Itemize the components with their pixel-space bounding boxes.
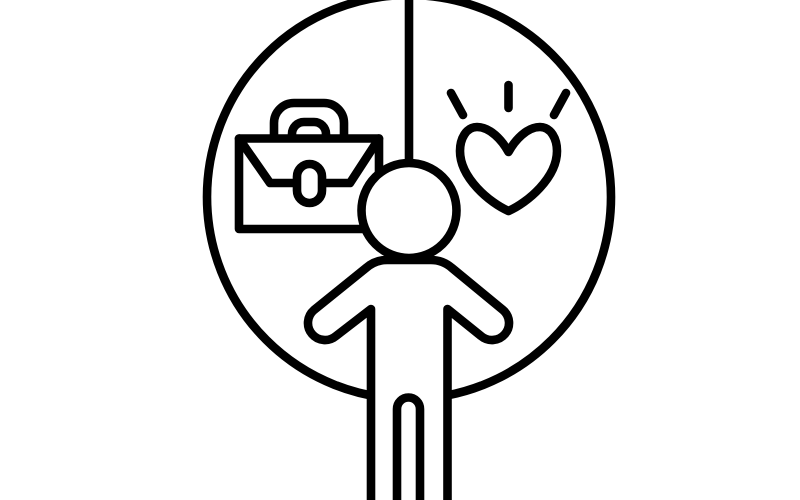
briefcase body: [239, 138, 379, 229]
vertical divider: [405, 0, 413, 165]
icon: heart with rays: [451, 85, 566, 211]
icon: briefcase: [239, 103, 379, 229]
rays: [451, 85, 566, 115]
briefcase flap: [239, 138, 379, 183]
person: [308, 163, 509, 500]
briefcase handle: [274, 103, 344, 138]
large circle: [207, 0, 611, 399]
briefcase clasp: [297, 164, 322, 203]
person legs: [397, 398, 420, 500]
person body: [308, 260, 509, 500]
heart: [460, 127, 557, 211]
person head: [362, 163, 456, 258]
